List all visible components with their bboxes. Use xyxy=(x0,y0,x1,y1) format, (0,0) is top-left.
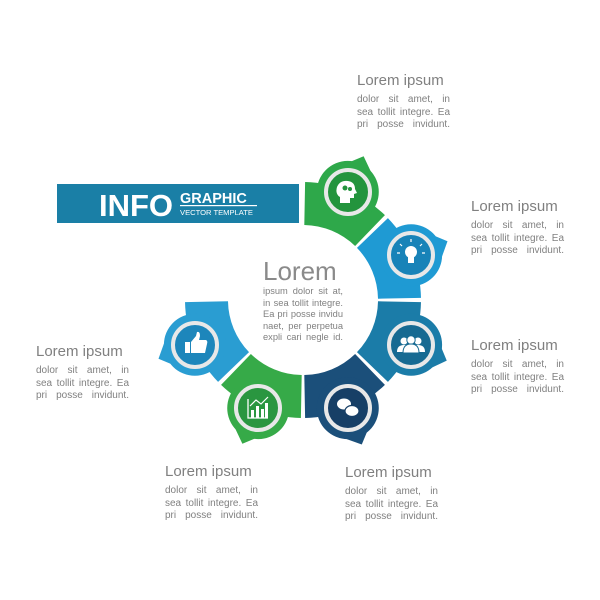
text block: right 1 xyxy=(471,198,564,256)
text block: left: Lorem ipsum xyxy=(36,343,123,360)
center text: Ea pri posse invidu xyxy=(263,309,343,319)
center text: in sea tollit integre. xyxy=(263,298,343,308)
text block: top: Lorem ipsum xyxy=(357,72,444,89)
text block: bottom right xyxy=(345,464,438,522)
text block: right 2: dolor sit amet, in xyxy=(471,359,564,370)
segment 5 green xyxy=(203,348,316,461)
icon: head gears xyxy=(326,170,370,214)
text block: right 1: sea tollit integre. Ea xyxy=(471,232,564,244)
text block: right 2: pri posse invidunt. xyxy=(471,384,564,395)
text block: bottom left: pri posse invidunt. xyxy=(165,510,258,521)
text block: bottom left xyxy=(165,463,258,521)
banner xyxy=(57,184,299,223)
text block: top xyxy=(357,72,450,130)
banner: GRAPHIC xyxy=(180,191,247,207)
center text: ipsum dolor sit at, xyxy=(263,286,343,296)
center text xyxy=(263,256,344,342)
text block: right 1: Lorem ipsum xyxy=(471,198,558,215)
segment 1 green top xyxy=(290,139,403,252)
center text: expli cari negle id. xyxy=(263,332,343,342)
icon: thumbs up xyxy=(173,323,217,367)
text block: right 1: pri posse invidunt. xyxy=(471,245,564,256)
text block: bottom right: pri posse invidunt. xyxy=(345,511,438,522)
icon: bar chart xyxy=(236,386,280,430)
text block: bottom right: dolor sit amet, in xyxy=(345,486,438,497)
text block: right 2: sea tollit integre. Ea xyxy=(471,372,564,382)
text block: left xyxy=(36,343,130,401)
icon: speech bubbles xyxy=(326,386,370,430)
segment 6 light blue xyxy=(142,287,255,400)
text block: left: sea tollit integre. Ea xyxy=(36,378,129,388)
banner: INFO xyxy=(99,188,173,223)
segment 4 navy xyxy=(290,348,403,461)
text block: top: pri posse invidunt. xyxy=(357,119,450,130)
text block: right 1: dolor sit amet, in xyxy=(471,220,564,231)
segment 2 light blue xyxy=(351,200,464,313)
text block: right 2: Lorem ipsum xyxy=(471,337,558,354)
text block: bottom right: sea tollit integre. Ea xyxy=(345,498,438,510)
icon: lightbulb xyxy=(389,233,433,277)
text block: bottom left: sea tollit integre. Ea xyxy=(165,498,258,508)
banner: VECTOR TEMPLATE xyxy=(180,208,253,217)
text block: top: sea tollit integre. Ea xyxy=(357,106,450,118)
text block: bottom right: Lorem ipsum xyxy=(345,464,432,481)
text block: left: dolor sit amet, in xyxy=(36,365,129,376)
center text: naet, per perpetua xyxy=(263,320,343,330)
text block: right 2 xyxy=(471,337,564,395)
icon: people xyxy=(389,323,433,367)
segment 3 blue xyxy=(351,287,464,400)
text block: top: dolor sit amet, in xyxy=(357,94,450,105)
text block: bottom left: Lorem ipsum xyxy=(165,463,252,480)
center text: Lorem xyxy=(263,256,337,286)
text block: left: pri posse invidunt. xyxy=(36,390,129,401)
text block: bottom left: dolor sit amet, in xyxy=(165,485,258,496)
